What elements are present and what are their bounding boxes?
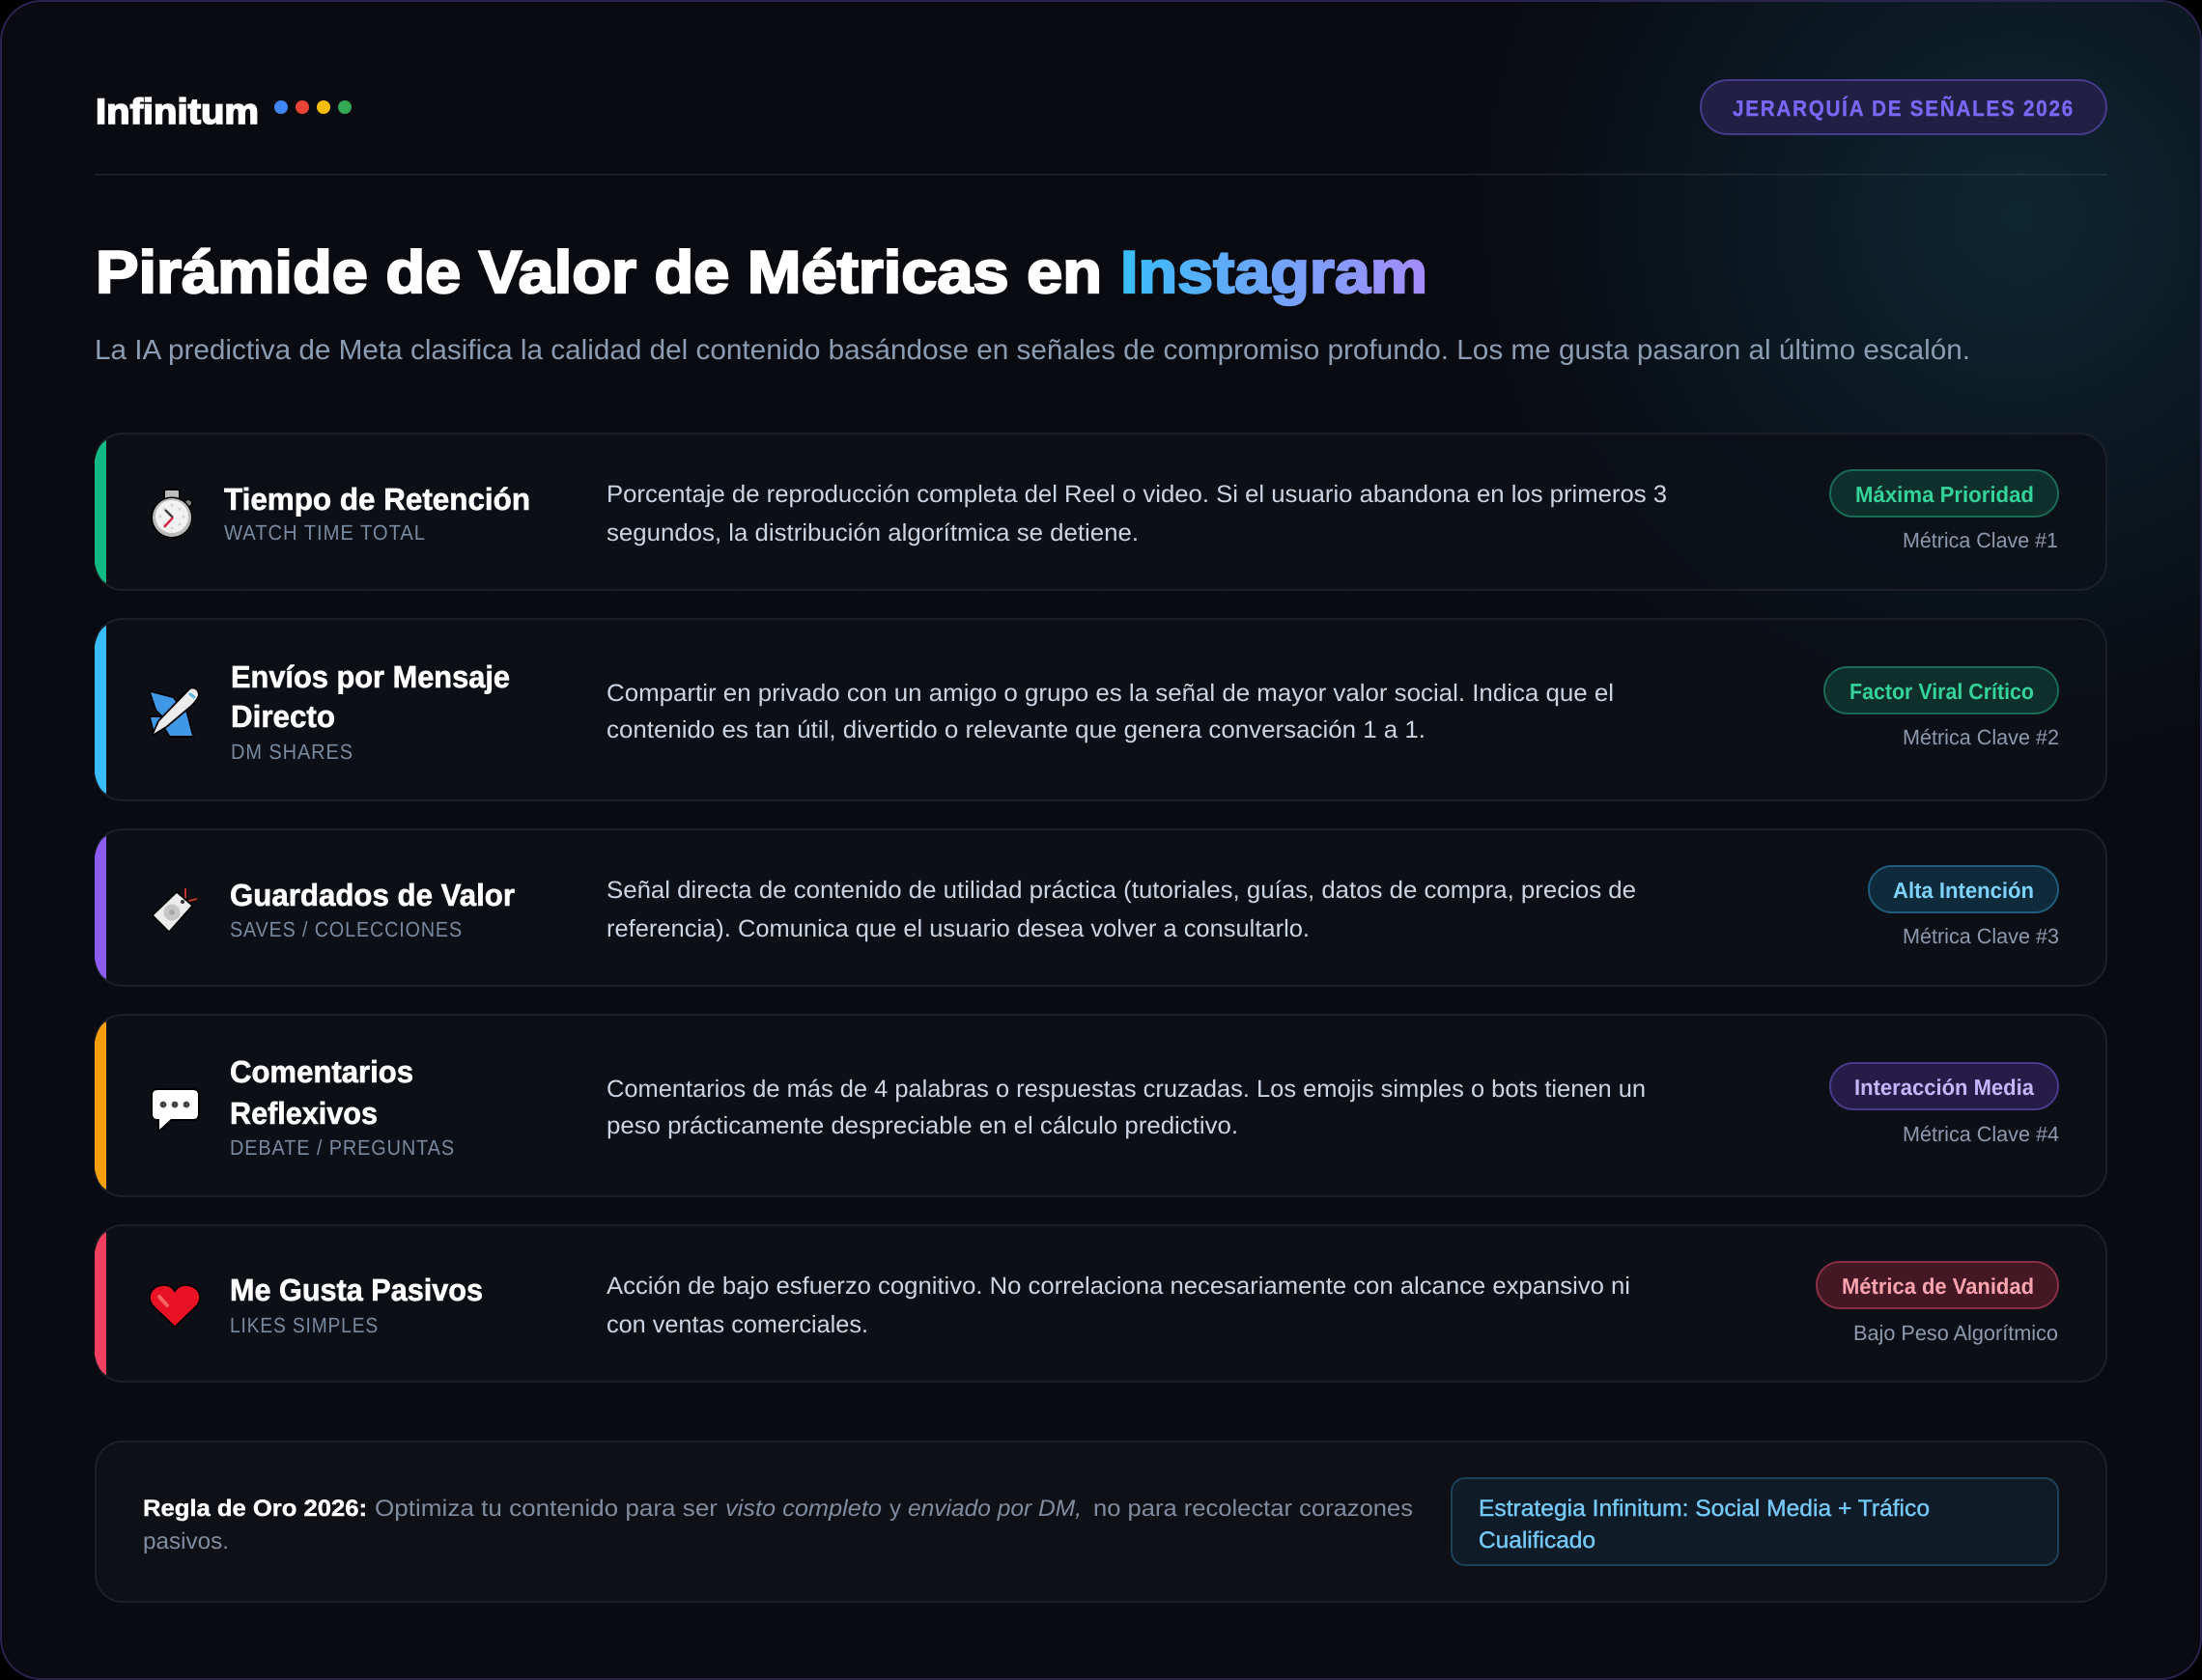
priority badge [1869,866,2058,912]
metric description: Acción de bajo esfuerzo cognitivo. No correlaciona necesariamente con alcance expansivo ni [607,1273,1630,1300]
metric description [607,877,1636,942]
metric title: Comentarios [230,1054,413,1089]
accent bar [95,440,106,583]
priority badge: Factor Viral Crítico [1849,679,2034,704]
metric description: Señal directa de contenido de utilidad práctica (tutoriales, guías, datos de compra, precios de [607,877,1636,904]
icon: speech balloon [153,1090,198,1130]
icon: airplane [151,688,198,736]
priority badge: Máxima Prioridad [1855,482,2034,507]
metric subtitle: SAVES / COLECCIONES [230,917,463,941]
metric description [607,481,1667,546]
panel: comentarios reflexivos [95,1015,2106,1196]
icon: label tag [154,888,197,931]
metric description: Porcentaje de reproducción completa del Reel o video. Si el usuario abandona en los primeros 3 [607,481,1667,508]
metric description [607,1273,1630,1338]
priority badge: Métrica de Vanidad [1842,1274,2034,1299]
panel: envíos por mensaje directo [95,619,2106,800]
metric title: Tiempo de Retención [224,482,530,517]
title: Instagram [1120,239,1427,306]
rank label: Bajo Peso Algorítmico [1853,1321,2058,1345]
card background [96,1225,2106,1382]
priority badge [1824,667,2058,714]
icon: stopwatch [151,490,193,539]
priority badge: Alta Intención [1893,878,2034,903]
accent bar [95,1232,106,1375]
metric subtitle: DM SHARES [231,740,353,764]
strategy callout: Estrategia Infinitum: Social Media + Tráfico [1479,1496,1930,1522]
panel: me gusta pasivos [95,1225,2106,1382]
metric title: Me Gusta Pasivos [230,1273,483,1307]
rank label: Métrica Clave #1 [1903,528,2058,552]
golden rule text: pasivos. [143,1528,229,1554]
rank label: Métrica Clave #3 [1903,924,2059,948]
brand name: Infinitum [96,92,259,131]
metric title [231,659,510,734]
accent bar [95,1022,106,1190]
metric description: peso prácticamente despreciable en el cálculo predictivo. [607,1112,1238,1139]
metric title: Envíos por Mensaje [231,659,510,694]
metric description: Comentarios de más de 4 palabras o respuestas cruzadas. Los emojis simples o bots tienen un [607,1076,1646,1103]
rank label: Métrica Clave #2 [1903,725,2059,749]
golden rule text: y [889,1496,901,1522]
metric description: segundos, la distribución algorítmica se detiene. [607,519,1139,546]
golden rule text: Regla de Oro 2026: [143,1496,367,1522]
metric subtitle: WATCH TIME TOTAL [224,520,426,545]
metric description: con ventas comerciales. [607,1311,868,1338]
year pill: JERARQUÍA DE SEÑALES 2026 [1733,96,2075,121]
golden rule text: Optimiza tu contenido para ser [375,1496,718,1522]
metric description: contenido es tan útil, divertido o relevante que genera conversación 1 a 1. [607,716,1426,743]
title: Pirámide de Valor de Métricas en [96,239,1102,306]
metric subtitle: DEBATE / PREGUNTAS [230,1135,455,1160]
icon: heart [151,1286,199,1326]
accent bar [95,836,106,979]
priority badge: Interacción Media [1854,1075,2034,1100]
golden rule text: no para recolectar corazones [1093,1496,1413,1522]
card background [96,829,2106,986]
metric title: Guardados de Valor [230,878,515,912]
metric description: Compartir en privado con un amigo o grupo es la señal de mayor valor social. Indica que el [607,680,1614,707]
brand logo [96,92,352,131]
card background [96,1015,2106,1196]
panel: footer rule [96,1442,2106,1602]
golden rule text [143,1496,1413,1554]
header [95,80,2107,176]
metric subtitle: LIKES SIMPLES [230,1313,379,1337]
metric title [230,1054,413,1131]
metric title: Directo [231,699,335,734]
card background [96,619,2106,800]
footer background [96,1442,2106,1602]
metric description: referencia). Comunica que el usuario desea volver a consultarlo. [607,915,1310,942]
accent bar [95,626,106,794]
priority badge [1830,470,2058,517]
subtitle: La IA predictiva de Meta clasifica la calidad del contenido basándose en señales de compromiso profundo. Los me gusta pasaron al último escalón. [95,335,1970,366]
brand dots [274,100,352,114]
year pill [1701,80,2106,134]
priority badge [1830,1063,2058,1109]
golden rule text: enviado por DM, [908,1496,1082,1522]
metric description [607,680,1614,743]
metric description [607,1076,1646,1139]
panel: guardados de valor [95,829,2106,986]
strategy callout: Cualificado [1479,1527,1595,1554]
metric title: Reflexivos [230,1096,378,1131]
rank label: Métrica Clave #4 [1903,1122,2059,1146]
panel: tiempo de retención [95,434,2106,590]
golden rule text: visto completo [725,1496,882,1522]
priority badge [1817,1262,2058,1308]
card background [96,434,2106,590]
strategy callout [1452,1478,2058,1565]
